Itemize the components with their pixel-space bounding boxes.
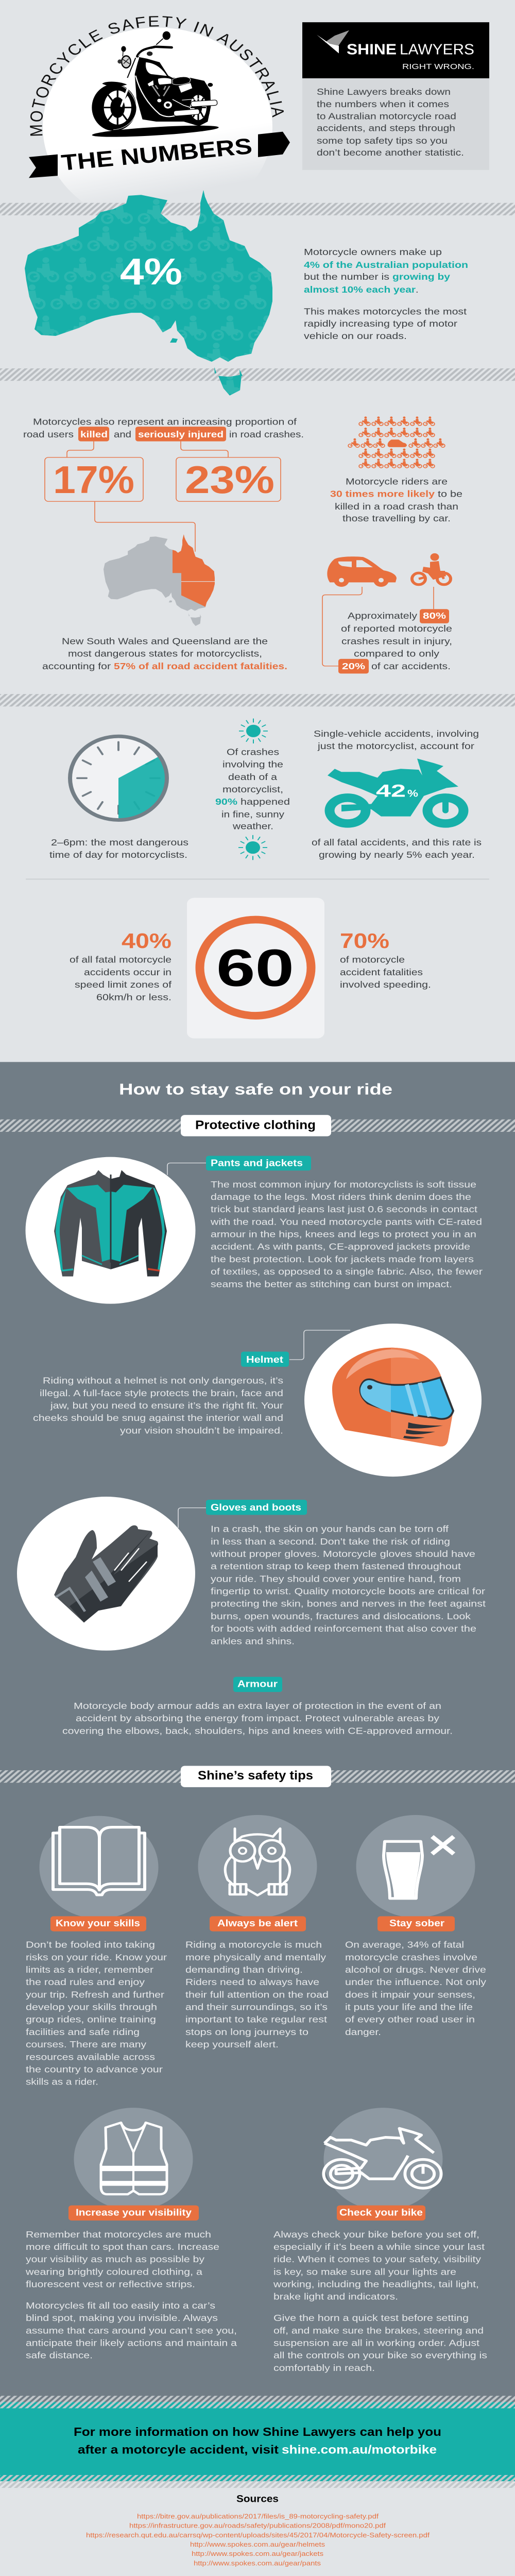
section header: shine's safety tips [0,1766,515,1787]
pill: 80 percent: 80% [423,611,446,621]
text: sunny weather: weather. [232,821,273,831]
label: pants and jackets [206,1156,311,1171]
text: check your bike body: especially if it’s been a while since your last [273,2242,485,2252]
text: sunny weather: Of crashes [227,747,279,757]
intro text [317,87,464,158]
pill: 20 percent [338,659,369,673]
text: gloves and boots body: for boots with added reinforcement that also cover the [211,1623,476,1634]
arched title [42,26,272,137]
text: 70 percent: of motorcycle [340,955,405,964]
text: check your bike body: ride. When it comes to your safety, visibility [273,2254,482,2264]
heading: sources: Sources [236,2494,279,2504]
ribbon: the numbers: THE NUMBERS [60,133,253,175]
panel: call to action: shine.com.au/motorbike [282,2443,437,2456]
text: 40 percent: speed limit zones of [75,979,172,990]
source links: https://bitre.gov.au/publications/2017/files/is_89-motorcycling-safety.pdf [137,2513,379,2520]
source links: https://infrastructure.gov.au/roads/safety/publications/2008/pdf/mono20.pdf [129,2522,386,2530]
text: 40 percent: of all fatal motorcycle [70,955,171,964]
label: gloves and boots: Gloves and boots [211,1502,301,1513]
text: stay sober body: danger. [345,2027,381,2037]
sign: speed limit 60: 60 [216,939,294,997]
text: 30 times more likely: killed in a road crash than [335,501,458,511]
text: stay sober body: alcohol or drugs. Never drive [345,1964,486,1975]
text: always be alert body: stops on long journeys to [185,2027,308,2037]
heading: how to stay safe: How to stay safe on your ride [119,1080,392,1098]
panel: call to action [0,2396,515,2488]
panel: shine lawyers logo and intro: SHINE [347,41,397,58]
panel: shine lawyers logo and intro: LAWYERS [400,41,474,58]
text: owner statistics: This makes motorcycles the most [304,307,467,316]
section header: shine's safety tips: Shine’s safety tips [198,1768,313,1783]
label: increase your visibility [68,2206,199,2221]
logo block [302,22,489,78]
text: helmet body [33,1376,283,1435]
text: pants and jackets body: accident. As with pants, CE-approved jackets provide [211,1242,470,1251]
text: stay sober body: motorcycle crashes involve [345,1952,477,1962]
text: single vehicle bottom: of all fatal accidents, and this rate is [312,837,482,847]
source links: http://www.spokes.com.au/gear/pants [194,2559,321,2567]
label: always be alert [210,1916,306,1931]
ribbon: the numbers [29,132,290,178]
text: check your bike body [273,2229,487,2373]
text: gloves and boots body: burns, open wounds, fractures and dislocations. Look [211,1611,471,1621]
icon: clock 2 to 6 pm [70,736,167,820]
text: dangerous states [42,636,287,671]
text: sunny weather: motorcyclist, [222,784,283,794]
text: 70 percent: accident fatalities [340,967,423,977]
sources [86,2494,430,2567]
icon: helmet [332,1348,453,1446]
text: sunny weather: happened [241,796,290,807]
text: call to action: For more information on how Shine Lawyers can help you [74,2426,441,2439]
text: dangerous states: most dangerous states for motorcyclists, [68,649,262,658]
text: stay sober body: does it impair your senses, [345,1990,475,1999]
text: stay sober body [345,1940,487,2037]
pill: seriously injured [135,427,226,442]
text: always be alert body: important to take regular rest [185,2014,328,2024]
label: stay sober [377,1916,455,1931]
text: always be alert body: and their surroundings, so it’s [185,2002,328,2012]
label: stay sober: Stay sober [389,1918,444,1929]
text: owner statistics: 4% of the Australian population [304,260,468,270]
white circle [43,28,272,226]
text: check your bike body: comfortably in reach. [273,2363,375,2373]
intro text: Shine Lawyers breaks down [317,87,451,97]
title badge with motorcycle [29,16,290,196]
text: sunny weather: death of a [228,772,278,782]
text: visibility body: Motorcycles fit all too easily into a car’s [26,2300,215,2311]
tip: increase your visibility [25,2108,237,2360]
text: owner statistics: rapidly increasing type of motor [304,318,457,329]
text: injury comparison: Approximately [348,611,418,621]
sign: speed limit 60 [187,898,324,1039]
text: 40 percent: accidents occur in [84,967,171,977]
item: pants and jackets [26,1156,483,1304]
connector [178,1508,206,1528]
map: australia 4 percent [25,190,272,396]
text: clock caption [49,837,188,860]
text: check your bike body: off, and make sure the brakes, steering and [273,2326,484,2335]
section header: protective clothing: Protective clothing [195,1118,316,1132]
text: single vehicle bottom: growing by nearly 5% each year. [319,850,475,860]
text: 40 percent: 60km/h or less. [96,992,171,1002]
stripe band 3 [0,694,515,706]
text: 30 times more likely: those travelling by car. [342,513,451,523]
text: gloves and boots body: ankles and shins. [211,1636,295,1646]
text: know your skills body: develop your skills through [26,2002,157,2012]
text: pants and jackets body: with the road. You need motorcycle pants with CE-rated [210,1217,482,1227]
stripe band 1 [0,203,515,215]
icon: jacket [54,1170,167,1277]
text: dangerous states: accounting for [42,661,111,671]
stripe band 2 [0,368,515,381]
text: check your bike body: is key, so make sure all your lights are [273,2267,456,2277]
text: check your bike body: Give the horn a quick test before setting [273,2313,469,2323]
text: visibility body: safe distance. [26,2350,93,2360]
text: gloves and boots body: a retention strap to keep them fastened throughout [211,1561,461,1571]
intro box [302,78,489,170]
text: gloves and boots body: fingertip to wrist. Quality motorcycle boots are critical for [211,1586,485,1596]
text: gloves and boots body: without proper gloves. Motorcycle gloves should have [210,1549,475,1559]
text: stay sober body: of every other road user in [345,2014,475,2024]
connector [167,1163,206,1175]
panel: shine lawyers logo and intro: RIGHT WRONG. [402,63,474,71]
text: visibility body [25,2229,237,2360]
text: clock caption: 2–6pm: the most dangerous [51,837,188,847]
connector [289,1330,350,1360]
text: single vehicle bottom [312,837,482,860]
text: injury comparison: of reported motorcycle [341,624,452,634]
icon: glove [54,1526,158,1622]
icon: beer glass and cross [384,1837,454,1899]
text: killed and injured intro: road users [23,429,74,439]
icon: book [53,1827,145,1895]
section header: protective clothing [0,1115,515,1137]
label: know your skills: Know your skills [56,1918,140,1929]
text: always be alert body: more physically and mentally [185,1952,327,1962]
panel: call to action: after a motorcyle accident, visit [78,2443,279,2456]
text: pants and jackets body: of textiles, as opposed to a single fabric. Also, the fewer [211,1266,483,1277]
text: helmet body: Riding without a helmet is not only dangerous, it’s [43,1376,283,1385]
text: armour body: accident by absorbing the energy from impact. Protect vulnerable areas by [76,1713,440,1723]
pill: 80 percent [420,609,449,623]
text: owner statistics: but the number is [304,272,389,282]
text: owner statistics: almost 10% each year [304,285,416,295]
big number: 4% [120,250,182,293]
text: visibility body: blind spot, making you invisible. Always [26,2313,218,2323]
text: visibility body: wearing brightly coloured clothing, a [25,2267,203,2277]
label: armour [233,1677,282,1692]
map: states nsw and queensland [104,534,216,626]
label: always be alert: Always be alert [217,1918,298,1929]
text: pants and jackets body: seams the better as stitching can burst on impact. [211,1279,452,1289]
text: know your skills body: courses. There are many [26,2039,147,2049]
text: injury comparison: compared to only [354,649,440,658]
text: owner statistics: vehicle on our roads. [304,331,407,341]
label: helmet: Helmet [246,1354,284,1365]
text: single vehicle top [314,728,479,751]
text: helmet body: jaw, but you need to ensure it’s the right fit. Your [50,1400,283,1411]
text: sunny weather: in fine, sunny [221,809,285,819]
panel: how to stay safe [0,1062,515,2402]
label: helmet [241,1351,289,1367]
text: visibility body: anticipate their likely actions and maintain a [26,2338,237,2348]
text: armour body [62,1701,453,1736]
text: always be alert body: Riders need to always have [185,1977,319,1987]
icon: sun bottom [238,835,267,860]
text: pants and jackets body: the best protection. Look for jackets made from layers [211,1254,474,1264]
text: single vehicle top: Single-vehicle accidents, involving [314,728,479,739]
text: armour body: Motorcycle body armour adds an extra layer of protection in the event of an [74,1701,441,1711]
panel: shine lawyers logo and intro [302,22,489,170]
text: pants and jackets body [210,1179,483,1289]
text: always be alert body: Riding a motorcycle is much [185,1940,322,1950]
tip: always be alert [185,1815,329,2049]
text: gloves and boots body: In a crash, the skin on your hands can be torn off [211,1524,449,1534]
icon: shine tick [317,30,349,54]
connector lines car and bike [322,587,434,666]
stat box: 17 percent: 17% [53,458,134,501]
text: visibility body: fluorescent vest or reflective strips. [26,2279,195,2289]
item: helmet [33,1324,482,1477]
text: dangerous states: 57% of all road accident fatalities. [114,661,287,671]
pill: killed [78,427,109,442]
text: know your skills body: your trip. Refresh and further [26,1990,164,1999]
intro text: to Australian motorcycle road [317,111,456,121]
text: always be alert body: demanding than driving. [185,1964,303,1975]
source links [86,2513,430,2567]
text: helmet body: your vision shouldn’t be impaired. [120,1426,283,1435]
text: 40 percent [70,929,172,1002]
text: killed and injured intro [23,417,304,442]
icon: teal motorcycle 42 percent: % [407,788,418,799]
icon: owl [225,1828,290,1895]
label: check your bike: Check your bike [339,2208,423,2218]
text: know your skills body: the country to advance your [26,2064,163,2074]
label: armour: Armour [237,1679,278,1689]
text: dangerous states: New South Wales and Queensland are the [62,636,268,646]
text: stay sober body: it puts your life and the life [345,2002,473,2012]
label: increase your visibility: Increase your visibility [76,2208,192,2218]
pill: killed: killed [80,429,108,439]
text: check your bike body: working, including the headlights, tail light, [273,2279,479,2289]
icon: sun top [239,719,268,743]
text: 30 times more likely: Motorcycle riders are [346,477,448,486]
text: check your bike body: suspension are all in working order. Adjust [273,2338,480,2348]
text: gloves and boots body [210,1524,486,1646]
source links: http://www.spokes.com.au/gear/jackets [192,2550,323,2557]
text: pants and jackets body: The most common injury for motorcyclists is soft tissue [211,1179,476,1190]
text: sunny weather: involving the [222,759,283,769]
label: check your bike [337,2206,425,2221]
text: visibility body: your visibility as much as possible by [26,2254,205,2264]
text: armour body: covering the elbows, back, shoulders, hips and knees with CE-approved armour. [62,1726,453,1736]
text: know your skills body [26,1940,167,2087]
tip: stay sober [345,1815,487,2037]
text: killed and injured intro: and [114,429,131,439]
text: injury comparison [338,609,452,673]
text: stay sober body: On average, 34% of fatal [345,1940,464,1950]
text: owner statistics: Motorcycle owners make up [304,247,442,257]
text: know your skills body: group rides, online training [26,2014,156,2024]
icon: teal motorcycle 42 percent: 42 [376,781,406,801]
label: know your skills [50,1916,146,1931]
text: owner statistics [304,247,468,341]
text: single vehicle top: just the motorcyclist, account for [317,741,474,751]
text: 70 percent: involved speeding. [340,979,431,990]
icon: motorcycle [92,31,219,139]
source links: https://research.qut.edu.au/carrsq/wp-content/uploads/sites/45/2017/04/Motorcycle-Safety-screen.pdf [86,2531,430,2539]
text: killed and injured intro: Motorcycles also represent an increasing proportion of [33,417,297,427]
icon: teal motorcycle 42 percent [328,758,464,823]
text: visibility body: assume that cars around you can’t see you, [26,2326,237,2335]
text: 30 times more likely [330,477,462,523]
text: pants and jackets body: damage to the legs. Most riders think denim does the [211,1192,471,1202]
text: 70 percent: 70% [340,929,389,953]
tip: know your skills [26,1816,167,2087]
stat box: 23 percent: 23% [185,458,274,501]
text: check your bike body: brake light and indicators. [273,2292,398,2301]
intro text: some top safety tips so you [317,135,448,146]
icon grid: 30 motorcycles and a car [348,416,445,468]
text: know your skills body: resources available across [26,2052,155,2062]
text: stay sober body: under the influence. Not only [345,1977,487,1987]
text: pants and jackets body: armour in the hips, knees and legs to protect you in an [211,1229,476,1239]
text: pants and jackets body: trick but standard jeans last just 0.6 seconds in contact [211,1204,478,1214]
text: owner statistics: . [416,285,419,295]
text: check your bike body: Always check your bike before you set off, [273,2229,479,2240]
text: 30 times more likely: 30 times more likely [330,489,435,499]
text: know your skills body: Don’t be fooled into taking [26,1940,155,1950]
text: gloves and boots body: your ride. They should cover your entire hand, from [211,1574,461,1584]
item: armour [62,1677,453,1736]
icon: motorcyclist [412,553,451,585]
icon: outline motorcycle [323,2128,441,2188]
text: killed and injured intro: in road crashes. [229,429,304,439]
icon: car [327,556,397,587]
text: injury comparison: of car accidents. [371,661,451,671]
intro text: don’t become another statistic. [317,148,464,158]
text: check your bike body: all the controls on your bike so everything is [273,2350,487,2360]
text: 30 times more likely: to be [438,489,462,499]
icon: safety vest [101,2123,167,2194]
label: gloves and boots [206,1500,307,1515]
text: sunny weather: 90% [215,796,237,807]
tip: check your bike [273,2108,487,2373]
text: visibility body: Remember that motorcycles are much [26,2229,211,2240]
source links: http://www.spokes.com.au/gear/helmets [190,2540,325,2548]
text: 70 percent [340,929,431,990]
connector lines to stat boxes [67,442,228,552]
text: owner statistics: growing by [392,272,451,282]
text: helmet body: cheeks should be snug against the interior wall and [33,1413,283,1423]
intro text: the numbers when it comes [317,99,449,109]
text: injury comparison: crashes result in injury, [341,636,452,646]
pill: seriously injured: seriously injured [138,429,224,439]
text: gloves and boots body: in less than a second. Don’t take the risk of riding [211,1536,450,1547]
item: gloves and boots [17,1497,486,1651]
text: know your skills body: the road rules and enjoy [26,1977,145,1987]
text: always be alert body: keep yourself alert. [185,2039,279,2049]
text: clock caption: time of day for motorcyclists. [49,850,187,860]
title badge with motorcycle: MOTORCYCLE SAFETY IN AUSTRALIA [30,16,284,136]
text: know your skills body: skills as a rider. [26,2077,98,2087]
text: gloves and boots body: protecting the skin, bones and nerves in the feet against [211,1599,486,1608]
text: know your skills body: facilities and safe riding [26,2027,140,2037]
text: know your skills body: risks on your ride. Know your [26,1952,167,1962]
text: know your skills body: limits as a rider, remember [26,1964,153,1975]
text: 40 percent: 40% [122,929,171,953]
label: pants and jackets: Pants and jackets [211,1158,303,1168]
text: always be alert body [185,1940,329,2049]
text: sunny weather [215,747,290,831]
text: always be alert body: their full attention on the road [185,1990,329,1999]
text: visibility body: more difficult to spot than cars. Increase [26,2242,219,2252]
text: helmet body: illegal. A full-face style protects the brain, face and [40,1388,283,1398]
intro text: accidents, and steps through [317,123,455,133]
pill: 20 percent: 20% [342,661,365,671]
